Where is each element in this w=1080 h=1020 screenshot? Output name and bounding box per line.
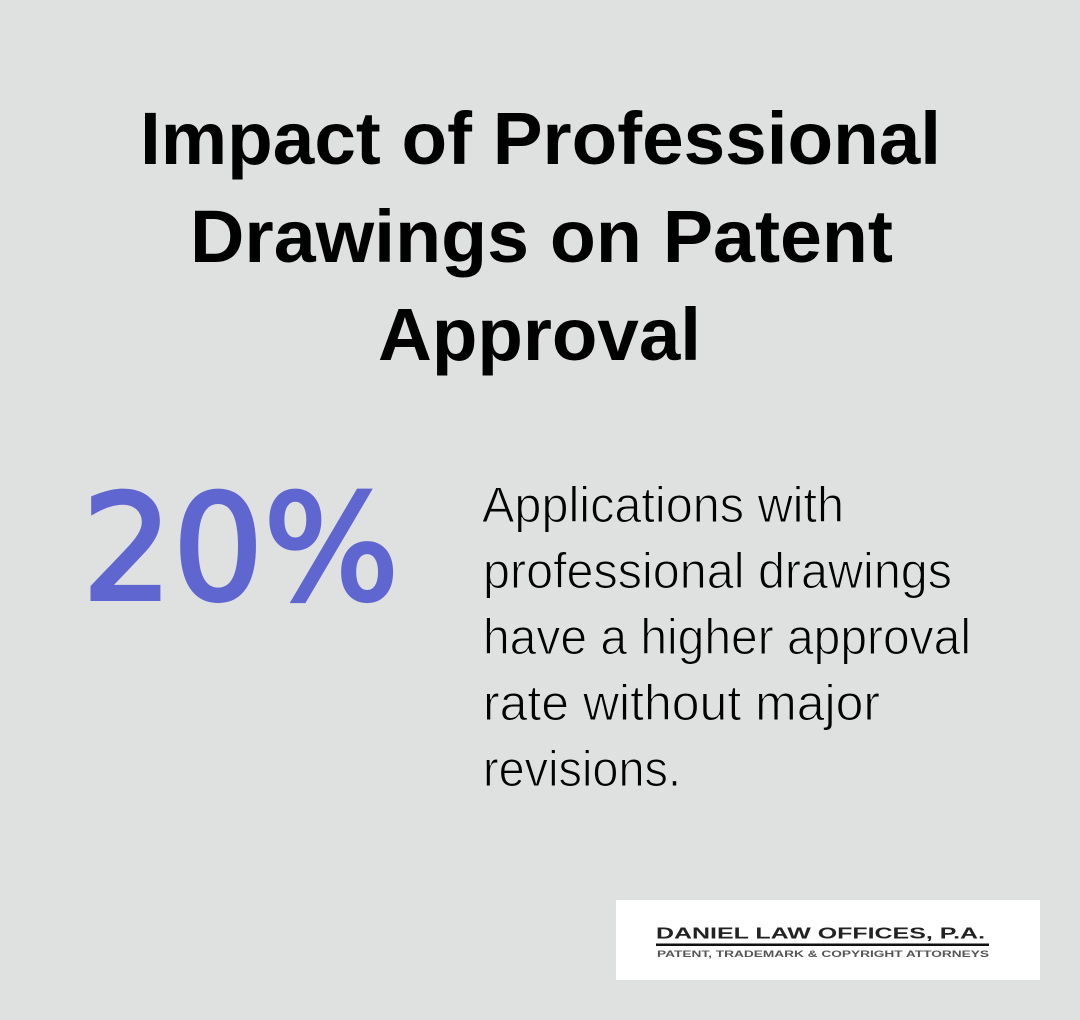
description text: Applications with: [482, 477, 844, 533]
description text: professional drawings: [483, 543, 952, 599]
statistic: 20%: 20%: [82, 464, 399, 634]
title: Drawings on Patent: [190, 195, 893, 278]
logo: Daniel Law Offices: DANIEL LAW OFFICES, P.A.: [656, 926, 985, 942]
description text: have a higher approval: [483, 609, 971, 665]
title: Approval: [378, 293, 701, 376]
logo: Daniel Law Offices: [616, 900, 1040, 980]
title: [140, 97, 941, 376]
description text: revisions.: [483, 741, 681, 797]
logo: Daniel Law Offices: PATENT, TRADEMARK & COPYRIGHT ATTORNEYS: [657, 949, 989, 959]
description text: [482, 477, 971, 797]
description text: rate without major: [483, 675, 880, 731]
title: Impact of Professional: [140, 97, 941, 180]
